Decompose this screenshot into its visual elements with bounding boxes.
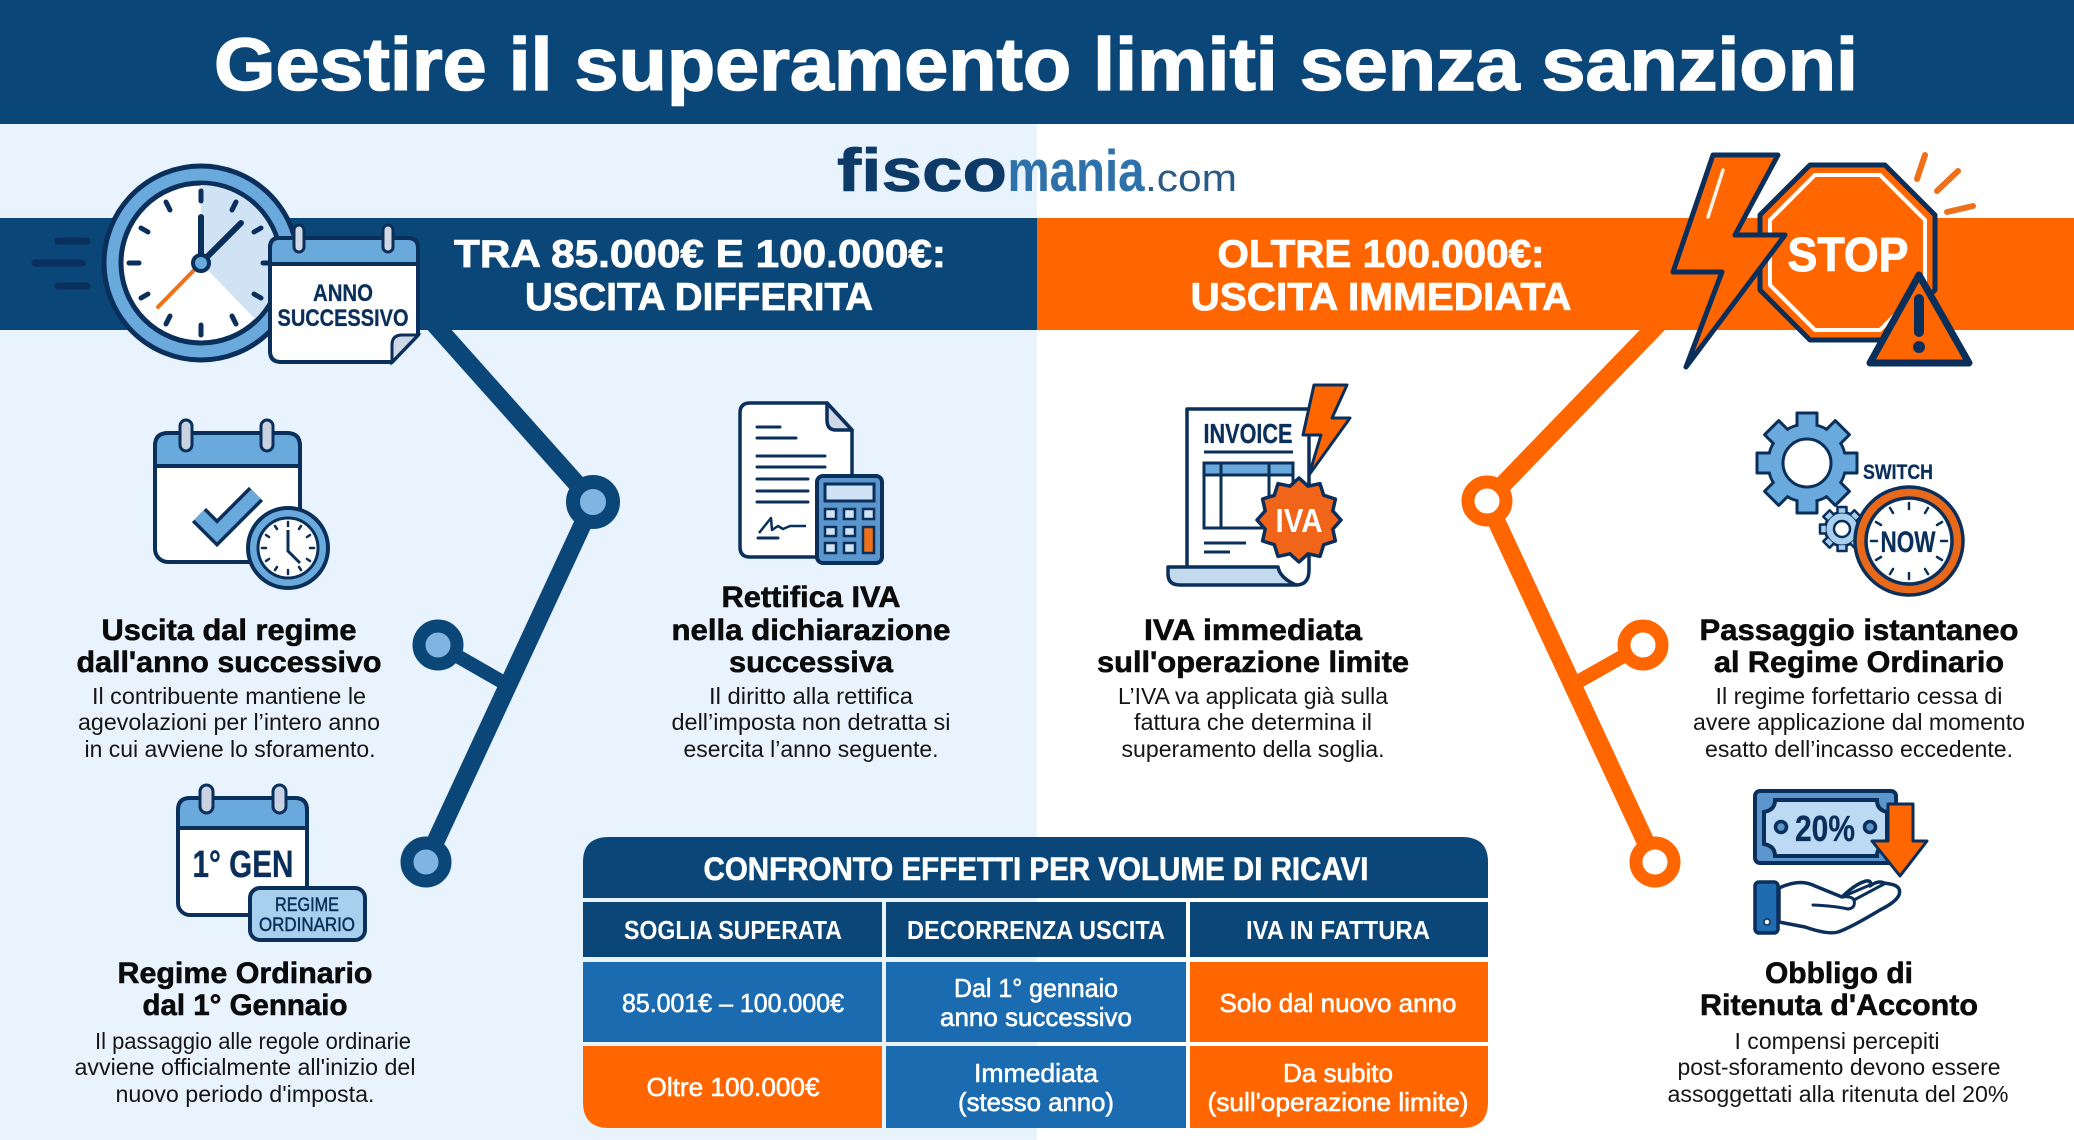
octagon sign (1760, 165, 1935, 340)
small gear (1820, 507, 1864, 551)
alert rays (1917, 155, 1973, 212)
text block: passaggio istantaneo: Il regime forfettario cessa di (1716, 683, 2002, 709)
icon: invoice with iva badge (1168, 385, 1350, 585)
logo: fiscomania.com (837, 137, 1237, 204)
text block: ritenuta d'acconto: I compensi percepiti (1734, 1028, 1940, 1054)
band: right heading: USCITA IMMEDIATA (1190, 276, 1572, 319)
logo: fiscomania.com: .com (1145, 158, 1237, 200)
band: right heading: OLTRE 100.000€: (1218, 233, 1544, 276)
icon: banknote 20% and hand (1755, 791, 1927, 933)
text block: rettifica iva: Il diritto alla rettifica (709, 683, 913, 709)
node: top (573, 482, 613, 522)
large gear (1757, 413, 1857, 513)
table header row: DECORRENZA USCITA (907, 915, 1165, 945)
text block: regime ordinario: dal 1° Gennaio (142, 989, 348, 1022)
table row 1: Dal 1° gennaio (954, 973, 1118, 1003)
lightning bolt (1673, 155, 1785, 367)
table row 2: Da subito (1283, 1058, 1393, 1088)
table row 2: (stesso anno) (958, 1087, 1114, 1117)
table header row: IVA IN FATTURA (1246, 915, 1430, 945)
table row 2: Immediata (974, 1058, 1099, 1088)
text block: passaggio istantaneo (1693, 614, 2025, 762)
text block: iva immediata: sull'operazione limite (1097, 646, 1409, 679)
logo: fiscomania.com: mania (1008, 139, 1145, 204)
text block: uscita dal regime (76, 614, 382, 762)
text block: ritenuta d'acconto (1668, 957, 2008, 1107)
text block: passaggio istantaneo: avere applicazione dal momento (1693, 709, 2025, 735)
text block: uscita dal regime: dall'anno successivo (76, 646, 382, 679)
icon: calendar anno successivo: SUCCESSIVO (278, 305, 408, 332)
icon: calendar anno successivo: ANNO (313, 280, 373, 307)
table row 1: anno successivo (940, 1002, 1132, 1032)
text block: ritenuta d'acconto: Ritenuta d'Acconto (1700, 989, 1978, 1022)
text block: rettifica iva: dell’imposta non detratta si (672, 709, 950, 735)
text block: uscita dal regime: in cui avviene lo sforamento. (84, 736, 376, 762)
text block: uscita dal regime: Il contribuente mantiene le (92, 683, 366, 709)
text block: rettifica iva (672, 581, 950, 762)
table row 1 (583, 962, 1488, 1042)
band: left heading: USCITA DIFFERITA (525, 276, 873, 319)
title banner (0, 0, 2074, 124)
icon: invoice with iva badge: INVOICE (1204, 418, 1292, 449)
icon: invoice with iva badge: IVA (1276, 502, 1322, 539)
text block: iva immediata (1097, 614, 1409, 762)
right connector timeline (1468, 290, 1691, 881)
table row 1: 85.001€ – 100.000€ (622, 988, 845, 1018)
icon: gears and now clock (1757, 413, 1963, 595)
band: right heading (1037, 218, 2074, 330)
icon: calendar 1° gen: ORDINARIO (259, 915, 355, 936)
title: Gestire il superamento limiti senza sanzioni (214, 23, 1858, 106)
icon: large clock (104, 166, 298, 360)
table title (583, 837, 1488, 898)
text block: regime ordinario: Regime Ordinario (118, 957, 372, 990)
icon: calendar 1° gen: 1° GEN (192, 844, 294, 886)
text block: rettifica iva: nella dichiarazione (672, 614, 950, 647)
icon: calendar 1° gen (178, 785, 365, 940)
down arrow (1872, 804, 1927, 876)
text block: uscita dal regime: agevolazioni per l’intero anno (78, 709, 380, 735)
text block: passaggio istantaneo: esatto dell’incasso eccedente. (1705, 736, 2013, 762)
left connector timeline (404, 290, 613, 881)
band: left heading (0, 218, 1037, 330)
text block: ritenuta d'acconto: post-sforamento devono essere (1678, 1054, 2000, 1080)
text block: rettifica iva: successiva (729, 646, 893, 679)
node: bottom (407, 843, 445, 881)
logo: fiscomania.com: fisco (837, 137, 1007, 204)
hand (1779, 881, 1900, 933)
icon: gears and now clock: SWITCH (1863, 461, 1933, 484)
node: middle (419, 626, 457, 664)
text block: passaggio istantaneo: Passaggio istantaneo (1700, 614, 2018, 647)
node: middle (1624, 626, 1662, 664)
text block: ritenuta d'acconto: assoggettati alla ritenuta del 20% (1668, 1081, 2008, 1107)
icon: speed lines (35, 241, 87, 286)
text block: iva immediata: L’IVA va applicata già sulla (1118, 683, 1388, 709)
table header row: SOGLIA SUPERATA (624, 915, 842, 945)
text block: regime ordinario: nuovo periodo d'imposta. (116, 1081, 374, 1107)
text block: rettifica iva: esercita l’anno seguente. (684, 736, 938, 762)
table header row (583, 902, 1488, 957)
icon: banknote 20% and hand: 20% (1795, 808, 1855, 849)
text block: uscita dal regime: Uscita dal regime (102, 614, 356, 647)
text block: passaggio istantaneo: al Regime Ordinario (1714, 646, 2004, 679)
icon: calendar 1° gen: REGIME (275, 895, 339, 916)
text block: iva immediata: superamento della soglia. (1122, 736, 1384, 762)
icon: document with calculator (740, 403, 882, 563)
text block: iva immediata: fattura che determina il (1134, 709, 1372, 735)
icon: gears and now clock: NOW (1880, 526, 1936, 559)
node: bottom (1636, 843, 1674, 881)
icon: calendar with check and clock (155, 420, 328, 588)
text block: ritenuta d'acconto: Obbligo di (1765, 957, 1913, 990)
warning triangle (1870, 275, 1969, 363)
comparison table: CONFRONTO EFFETTI PER VOLUME DI RICAVI (704, 851, 1368, 887)
text block: regime ordinario: avviene officialmente all'inizio del (74, 1054, 416, 1080)
now clock (1855, 487, 1963, 595)
icon: stop sign with lightning and warning (1673, 155, 1973, 367)
band: left heading: TRA 85.000€ E 100.000€: (454, 233, 946, 276)
text block: regime ordinario: Il passaggio alle regole ordinarie (95, 1028, 411, 1054)
text block: iva immediata: IVA immediata (1144, 614, 1362, 647)
icon: calendar anno successivo (270, 225, 418, 362)
table row 2 (583, 1046, 1488, 1128)
node: top (1468, 482, 1506, 520)
table row 2: (sull'operazione limite) (1208, 1087, 1468, 1117)
icon: stop sign with lightning and warning: STOP (1788, 229, 1908, 282)
text block: rettifica iva: Rettifica IVA (722, 581, 900, 614)
text block: regime ordinario (74, 957, 416, 1107)
table row 1: Solo dal nuovo anno (1220, 988, 1456, 1018)
comparison table (583, 837, 1488, 1128)
table row 2: Oltre 100.000€ (646, 1072, 820, 1102)
